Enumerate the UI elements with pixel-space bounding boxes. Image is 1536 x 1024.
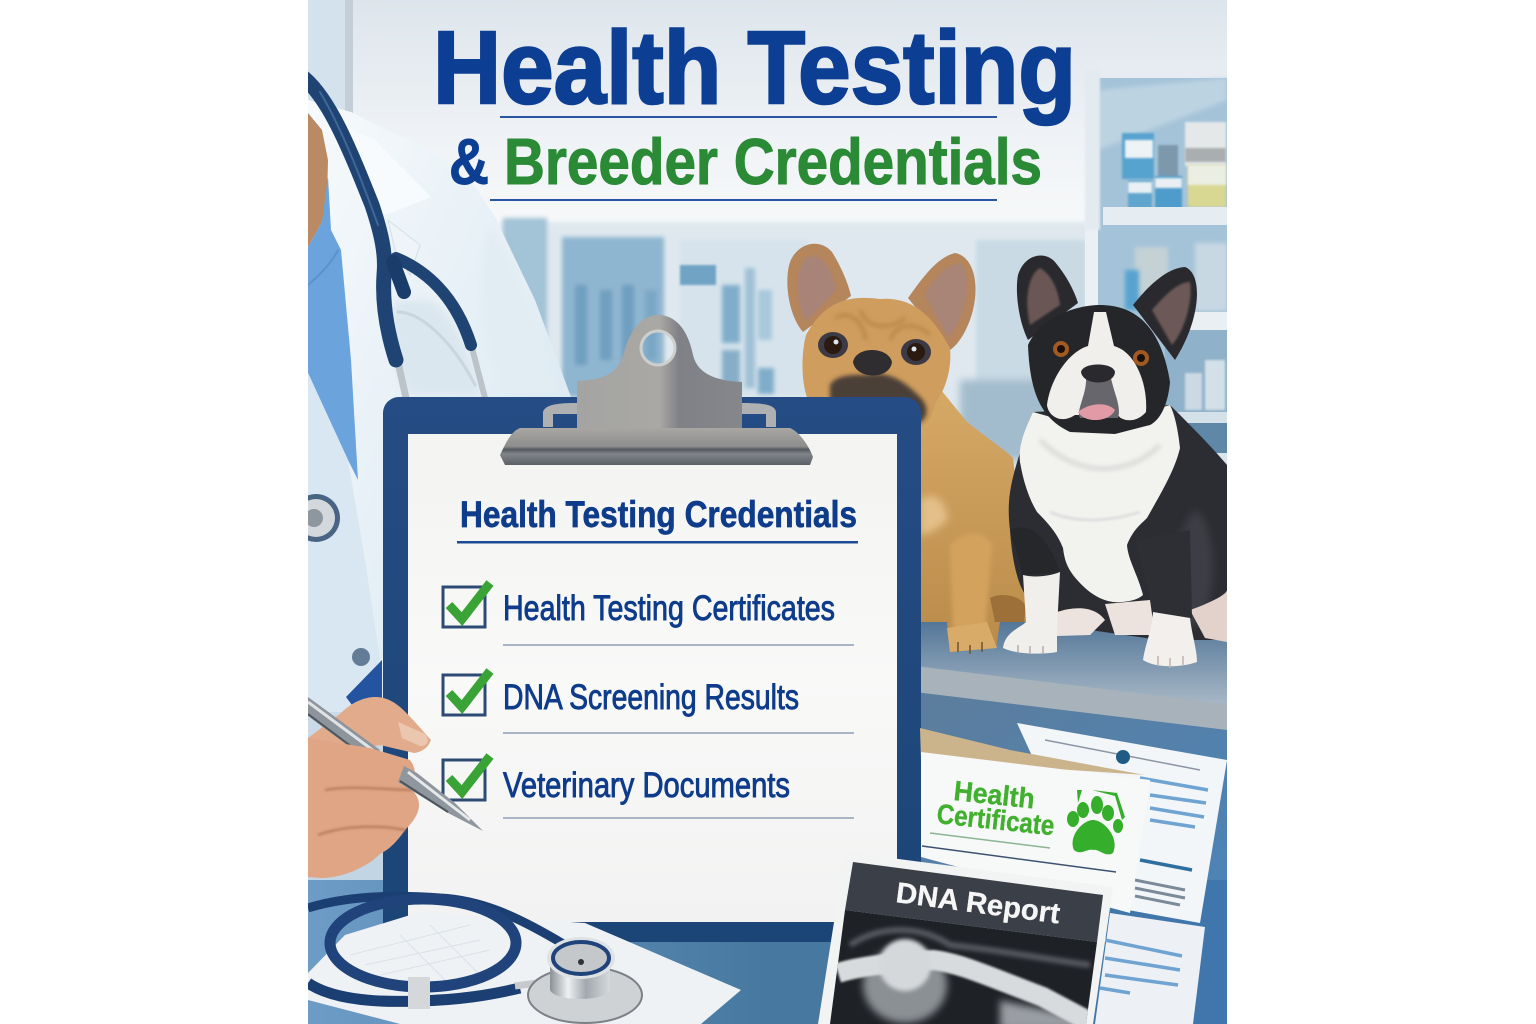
clipboard (383, 315, 921, 942)
title line: & Breeder Credentials: Breeder Credentials (504, 125, 1042, 198)
hand holding pen (308, 697, 483, 878)
stethoscope chest piece (528, 937, 642, 1023)
checklist item: veterinary documents: Veterinary Documents (503, 766, 790, 805)
title line: Health Testing: Health Testing (433, 10, 1076, 125)
checklist item: health testing certificates: Health Testing Certificates (503, 589, 835, 628)
coat button (352, 648, 370, 666)
manila folder (920, 728, 1145, 775)
checklist item: veterinary documents (443, 756, 854, 819)
title (433, 10, 1076, 201)
tan dog ears (787, 244, 976, 350)
metal clip (500, 315, 813, 465)
checklist item: DNA screening results: DNA Screening Results (503, 678, 799, 717)
desk surface (308, 880, 1227, 1024)
tan dog head (802, 298, 950, 426)
back report sheet (1017, 723, 1227, 923)
health certificate page: Certificate (935, 798, 1056, 841)
tan French bulldog (787, 244, 1026, 654)
black dog head (1028, 305, 1170, 434)
notepad on desk (308, 912, 741, 1024)
checklist item: DNA screening results (443, 671, 854, 734)
pen barrel (308, 697, 380, 751)
black and white French bulldog (1003, 256, 1227, 668)
infographic scene (292, 0, 1227, 1024)
checklist heading: Health Testing Credentials (460, 494, 857, 535)
black dog ears (1017, 256, 1197, 360)
DNA report tablet: DNA Report (894, 877, 1062, 931)
desk stethoscope (308, 896, 642, 1023)
doctor in white coat (292, 78, 572, 724)
health certificate document stack (920, 723, 1227, 1024)
checklist item: health testing certificates (443, 583, 854, 646)
health certificate page: Health (952, 775, 1036, 814)
icon: coat chest piece (308, 494, 340, 542)
x-ray spine image (838, 930, 1090, 1024)
paper sheet (408, 434, 897, 922)
icon: neck stethoscope (304, 78, 485, 398)
health certificate page (921, 752, 1150, 913)
exam table (921, 622, 1227, 880)
white chest (1020, 405, 1180, 602)
front leg right (1150, 530, 1192, 618)
icon: green paw (1067, 790, 1125, 854)
belly and back paw (1057, 600, 1155, 636)
front leg left (1010, 530, 1011, 532)
shelving cabinet with bottles (1085, 60, 1227, 453)
coat pocket badge (346, 660, 382, 704)
pen tip (398, 766, 483, 831)
title line: & Breeder Credentials: & (449, 125, 489, 198)
background: clinic room (308, 0, 1227, 880)
lower report sheet (1095, 913, 1205, 1024)
DNA report tablet (818, 852, 1113, 1024)
